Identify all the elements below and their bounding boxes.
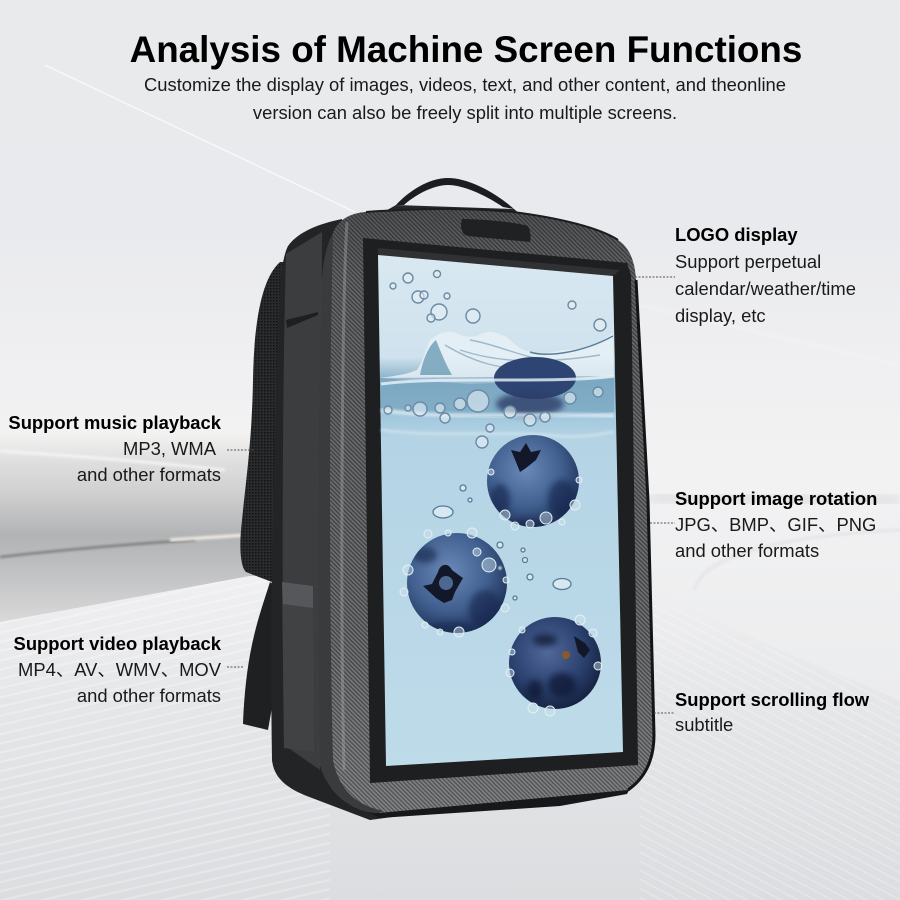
callout: scrolling subtitle: subtitle [675, 714, 733, 735]
screen image [378, 255, 623, 766]
backpack [240, 178, 654, 820]
callout: video playback: and other formats [77, 685, 221, 706]
callout: LOGO display: Support perpetual [675, 251, 821, 272]
callout: video playback: Support video playback [14, 633, 221, 654]
side pocket [282, 582, 314, 752]
blueberry 1 [487, 435, 582, 531]
shell left rim [317, 233, 384, 813]
blueberry 3 [506, 615, 602, 716]
callout: music playback: Support music playback [8, 412, 221, 433]
hard shell [317, 209, 654, 813]
callout: music playback: and other formats [77, 464, 221, 485]
callout: image rotation [675, 488, 877, 561]
mesh shoulder strap [240, 262, 284, 582]
callout leader lines [227, 277, 675, 713]
zip [380, 205, 520, 214]
callout: scrolling subtitle: Support scrolling flow [675, 689, 869, 710]
subtitle: Customize the display of images, videos, text, and other content, and theonline [144, 74, 786, 95]
logo window [461, 219, 531, 242]
callout: music playback: MP3, WMA [123, 438, 216, 459]
callout: music playback [8, 412, 221, 485]
bottom edge [345, 788, 630, 818]
callout: LOGO display: calendar/weather/time [675, 278, 856, 299]
floor [0, 576, 900, 900]
subtitle [144, 74, 786, 123]
callout: scrolling subtitle [675, 689, 870, 735]
side panel [283, 232, 322, 770]
title: Analysis of Machine Screen Functions [130, 29, 802, 70]
half submerged berry [494, 357, 576, 399]
callout: LOGO display: display, etc [675, 305, 766, 326]
callout: image rotation: and other formats [675, 540, 819, 561]
back body [271, 219, 400, 820]
water splash [380, 270, 614, 448]
shell right rim [628, 280, 654, 790]
callout: LOGO display [675, 224, 856, 326]
callout: LOGO display: LOGO display [675, 224, 798, 245]
bubbles [433, 485, 571, 600]
callout: image rotation: Support image rotation [675, 488, 877, 509]
callout: video playback: MP4、AV、WMV、MOV [18, 659, 221, 680]
callout: video playback [14, 633, 221, 706]
icon: top handle [396, 178, 514, 209]
subtitle: version can also be freely split into multiple screens. [253, 102, 677, 123]
callout: image rotation: JPG、BMP、GIF、PNG [675, 514, 876, 535]
screen bezel [363, 238, 638, 783]
lower strap [243, 582, 282, 730]
blueberry 2 [400, 528, 509, 637]
